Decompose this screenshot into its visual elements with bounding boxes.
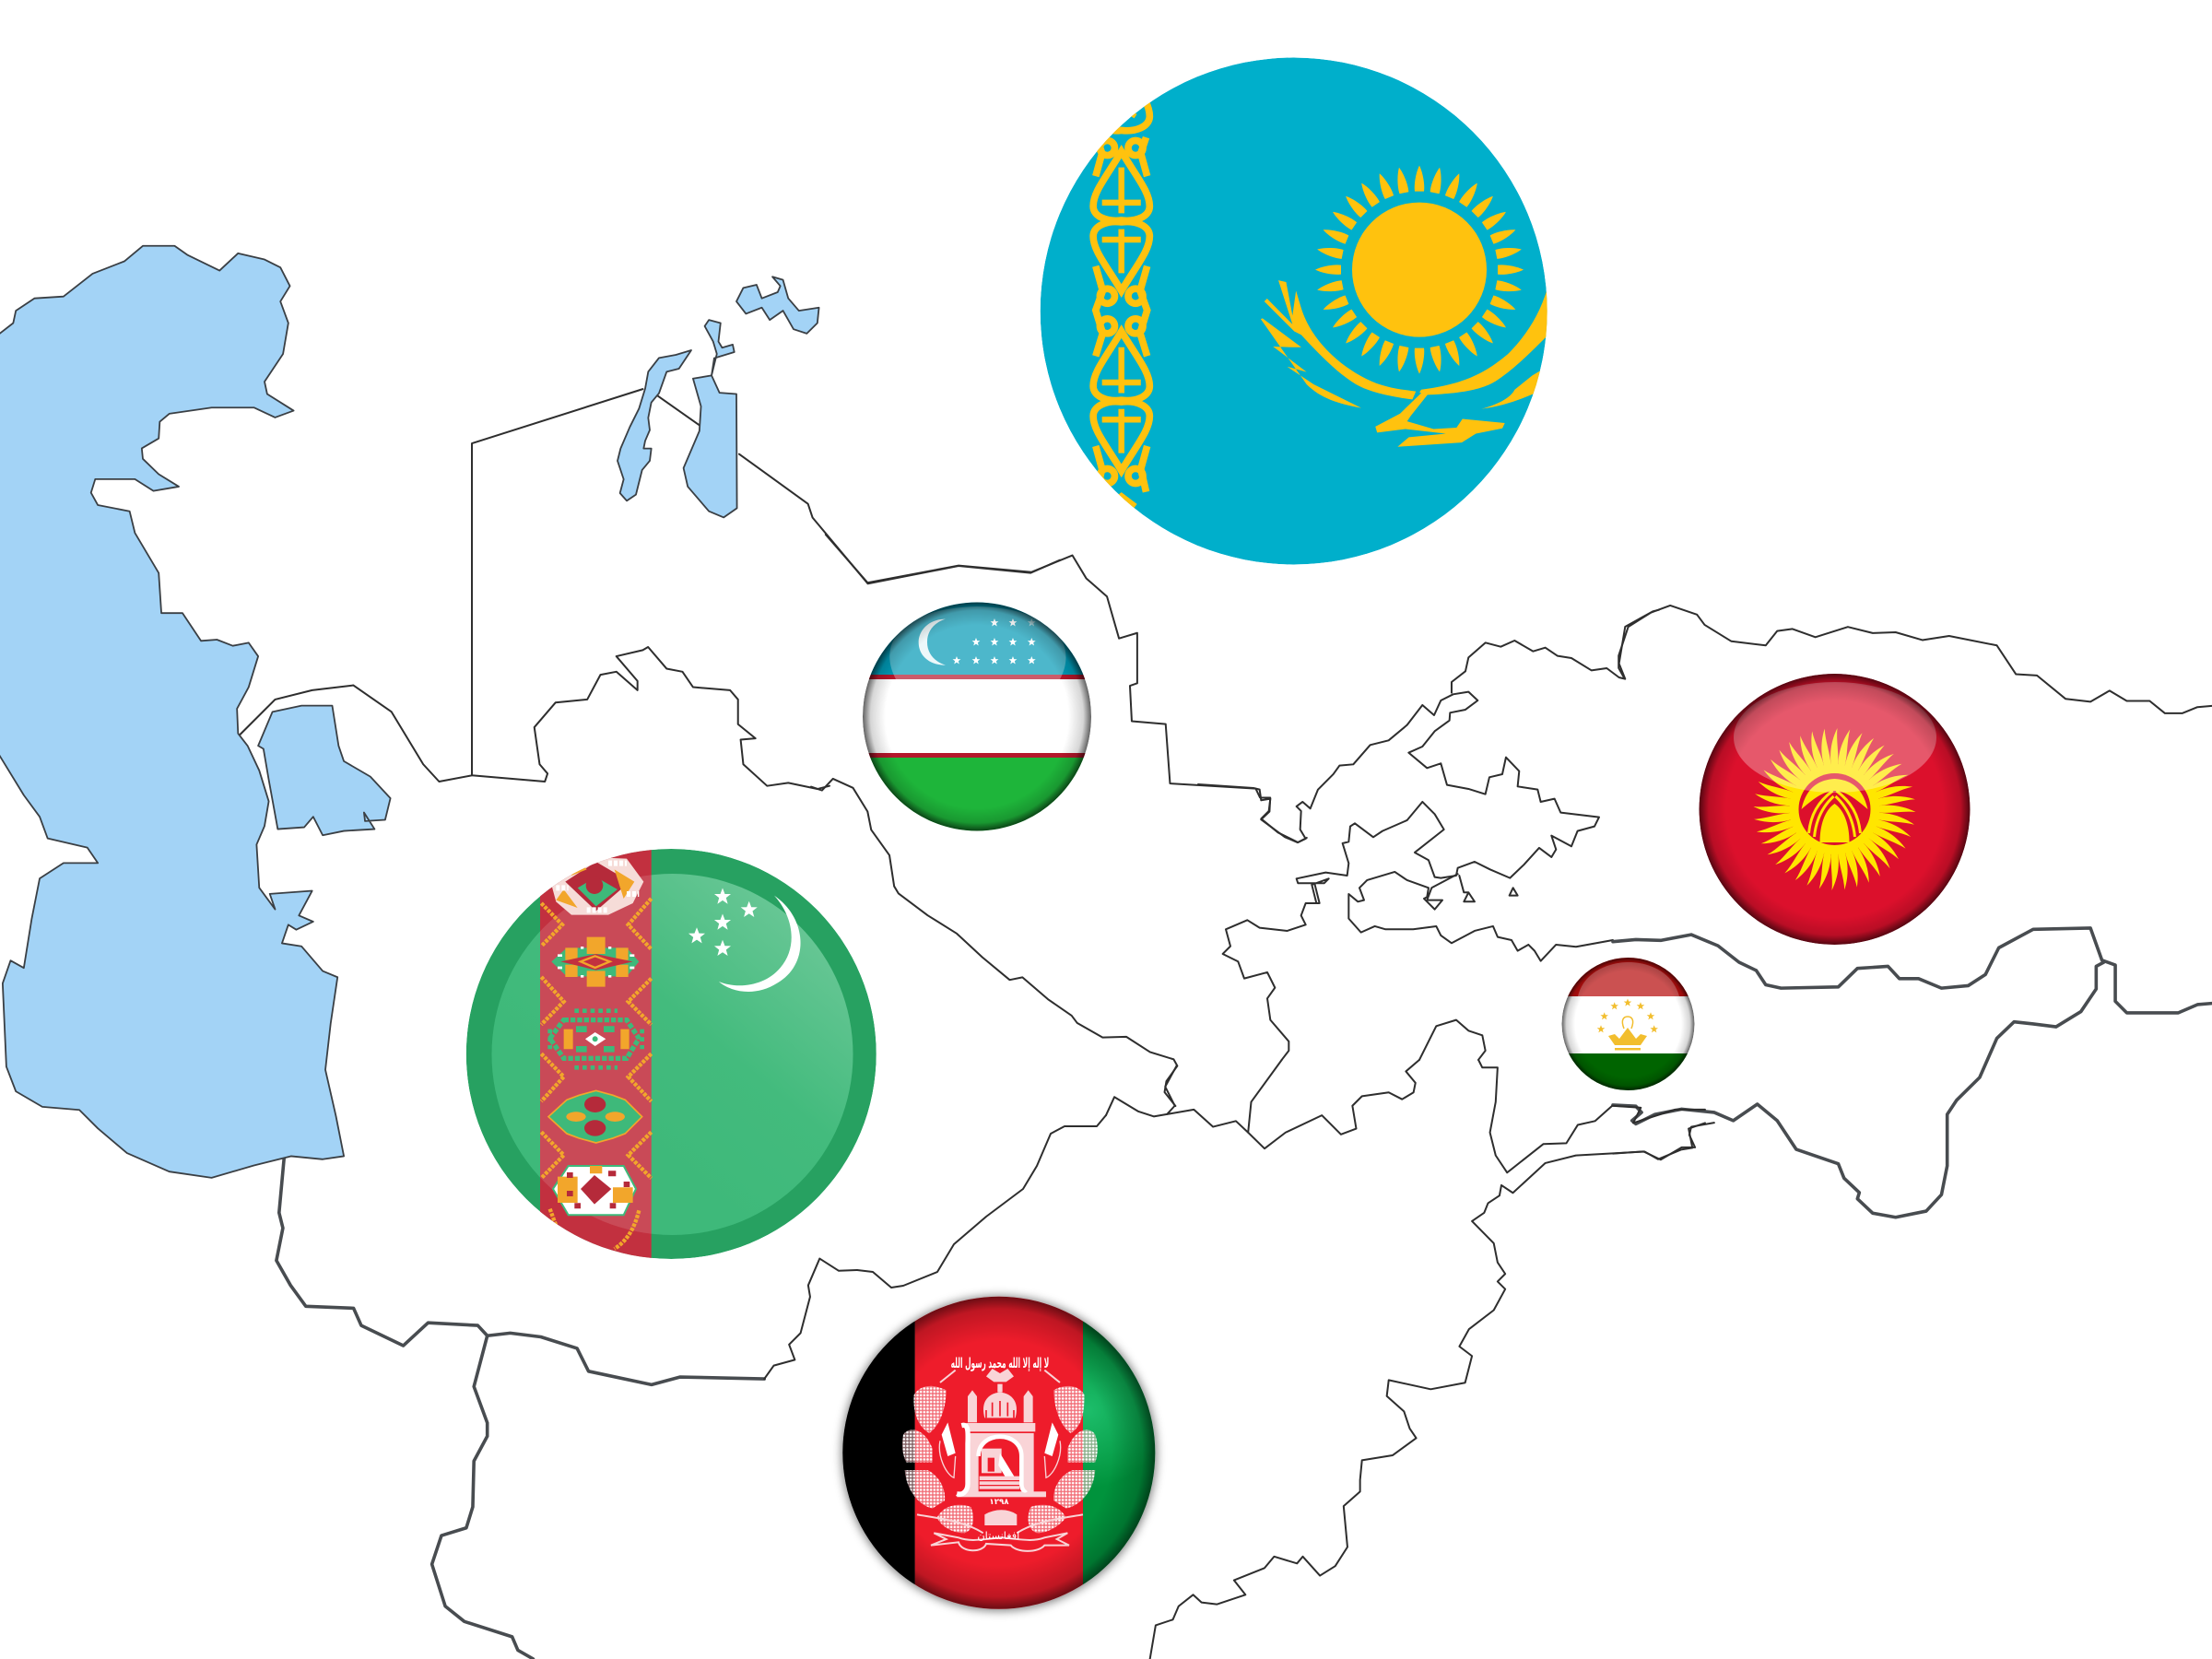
gul 2 bbox=[551, 937, 639, 987]
Aral Sea east lobe bbox=[684, 320, 737, 517]
flag: Afghanistan bbox=[839, 1290, 1161, 1615]
border: north Uzbekistan and Kazakhstan bbox=[657, 395, 1060, 583]
Tajikistan gloss bbox=[1578, 962, 1679, 996]
border: Uzbekistan east and Turkmen northeast bbox=[811, 535, 1307, 1106]
Tajikistan crown and stars bbox=[1597, 999, 1658, 1051]
Kazakhstan eagle bbox=[1261, 280, 1550, 447]
flag: Tajikistan bbox=[1561, 958, 1694, 1090]
carpet side frets bbox=[541, 899, 652, 1249]
arch of wheat stems bbox=[917, 1371, 1083, 1533]
Kyrgyzstan edge shading bbox=[1700, 674, 1971, 945]
Uzbekistan edge shading bbox=[863, 603, 1091, 831]
emblem inscriptions: ۱۲۹۸ bbox=[989, 1498, 1009, 1507]
Kazakhstan national ornament bbox=[1093, 62, 1149, 506]
Afghanistan emblem: لا إله إلا الله محمد رسول الله bbox=[951, 1355, 1049, 1371]
lower ornament and ribbon bbox=[984, 1510, 1017, 1525]
Turkmenistan green field bbox=[466, 849, 877, 1259]
Tajikistan edge shading bbox=[1561, 958, 1694, 1090]
water bodies bbox=[0, 246, 819, 1178]
Tajikistan stripes bbox=[1568, 958, 1688, 1090]
Afghanistan stripes bbox=[839, 1290, 1161, 1615]
Afghanistan emblem bbox=[902, 1355, 1098, 1551]
map: country borders bbox=[238, 389, 2212, 1659]
Uzbekistan crescent and stars bbox=[919, 618, 1036, 665]
gul 4 bbox=[548, 1090, 642, 1143]
gul 3 bbox=[550, 1011, 642, 1067]
Uzbekistan stripes bbox=[868, 603, 1086, 831]
Kyrgyzstan sun bbox=[1753, 728, 1915, 890]
Afghanistan edge shading bbox=[842, 1297, 1155, 1609]
flags beside the mosque bbox=[942, 1422, 1058, 1456]
gul 1 bbox=[551, 857, 643, 915]
border: Fergana and Tajikistan northern coastline bbox=[1198, 610, 1659, 1060]
Garabogazkol lagoon bbox=[258, 706, 391, 835]
border: Turkmen Afghan segment bbox=[857, 1115, 1106, 1288]
Turkmenistan inner gloss disc bbox=[492, 874, 853, 1235]
flag: Kyrgyzstan bbox=[1700, 674, 1971, 945]
emblem inscriptions: افغانستان bbox=[977, 1529, 1019, 1542]
Kazakhstan field bbox=[1041, 57, 1547, 564]
flag: Uzbekistan bbox=[857, 599, 1097, 836]
border: Turkmenistan south and Iran bbox=[276, 1159, 857, 1659]
Caspian Sea bbox=[0, 246, 344, 1178]
flag: Kazakhstan bbox=[1041, 57, 1550, 564]
Kyrgyzstan tunduk bbox=[1801, 779, 1867, 842]
Turkmenistan carpet ornaments bbox=[541, 857, 652, 1249]
flag: Turkmenistan bbox=[466, 830, 877, 1272]
Kazakhstan sun bbox=[1315, 166, 1524, 374]
Aral Sea north lobe bbox=[736, 276, 819, 334]
border: northern Kyrgyzstan bbox=[1618, 606, 2212, 713]
border: Afghanistan north and east bbox=[1106, 1060, 1705, 1659]
wheat wreath bbox=[902, 1386, 1098, 1533]
Turkmenistan crescent bbox=[719, 896, 801, 992]
emblem inscriptions bbox=[951, 1355, 1049, 1542]
Kyrgyzstan field bbox=[1700, 674, 1971, 945]
Aral Sea west lobe bbox=[618, 350, 691, 500]
Turkmenistan red carpet stripe bbox=[540, 830, 652, 1272]
flag shadow: Afghanistan bbox=[841, 1296, 1157, 1611]
border: southern Kyrgyzstan and Tajikistan bbox=[1613, 928, 2212, 1218]
border: west and Ustyurt Uzbekistan bbox=[238, 389, 830, 789]
Turkmenistan stripe gloss bbox=[540, 876, 651, 1233]
Kyrgyzstan gloss bbox=[1734, 682, 1936, 793]
gul 5 bbox=[553, 1166, 636, 1215]
mosque bbox=[957, 1369, 1046, 1497]
Turkmenistan stars bbox=[688, 888, 758, 956]
Uzbekistan gloss bbox=[889, 606, 1066, 679]
